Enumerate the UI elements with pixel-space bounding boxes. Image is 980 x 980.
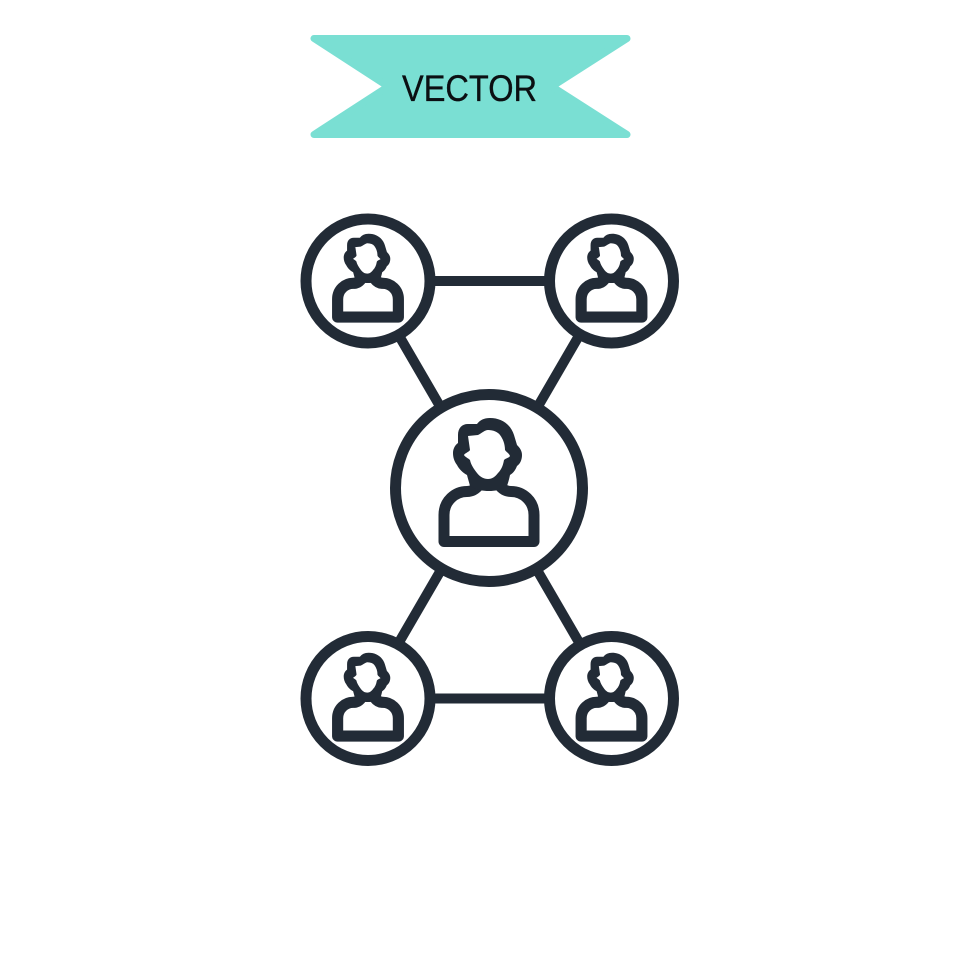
connector: top left diagonal <box>398 334 441 408</box>
connector: bottom left diagonal <box>398 570 441 644</box>
node: top left person <box>306 219 430 343</box>
connector: bottom horizontal <box>430 694 550 704</box>
node: top right person <box>550 219 674 343</box>
connector: top horizontal <box>430 276 550 286</box>
connector: top right diagonal <box>537 334 580 408</box>
banner label: VECTOR <box>402 68 537 109</box>
node: bottom right person <box>550 636 674 760</box>
banner: vector ribbon <box>314 38 627 134</box>
connector: bottom right diagonal <box>537 570 580 644</box>
node: center person <box>396 394 582 582</box>
node: bottom left person <box>306 636 430 760</box>
network diagram <box>306 219 674 760</box>
